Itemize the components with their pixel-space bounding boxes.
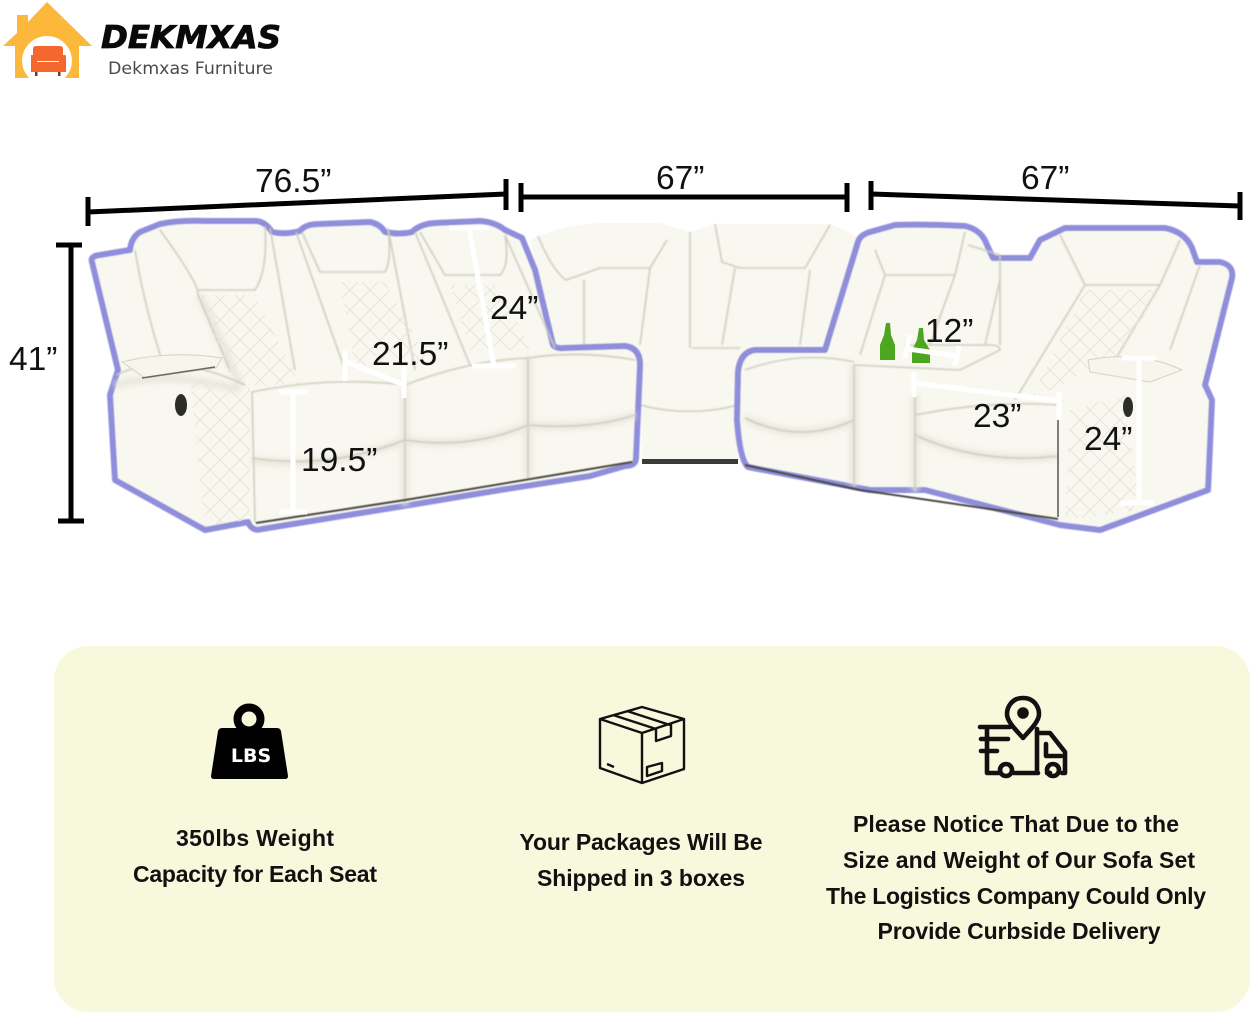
arm height dimension: 24: 24”: [1084, 421, 1132, 458]
sofa illustration: [92, 221, 1232, 530]
wordmark: DEKMXAS: [101, 20, 281, 56]
text: weight capacity: 350lbs Weight: [176, 825, 334, 851]
centre width dimension: 67: [521, 160, 847, 212]
back height dimension: 24: [449, 228, 538, 366]
text: curbside delivery notice: Size and Weight of Our Sofa Set: [843, 847, 1195, 873]
right shading: [745, 365, 1058, 490]
seat width dimension: 23: [914, 372, 1059, 435]
seat width dimension: 23: 23”: [973, 398, 1021, 435]
right arm control button: [1123, 397, 1133, 417]
text: curbside delivery notice: The Logistics Company Could Only: [826, 883, 1206, 909]
right width dimension: 67: 67”: [1021, 160, 1069, 197]
right seat cushions: [745, 358, 1058, 458]
arm height dimension: 24: [1084, 358, 1156, 503]
seat depth dimension: 21.5: 21.5”: [372, 336, 448, 373]
right width dimension: 67: [871, 160, 1240, 220]
overall width dimension: 76.5: [88, 163, 506, 226]
seat depth dimension: 21.5: [345, 336, 448, 398]
overall width dimension: 76.5: 76.5”: [255, 163, 331, 200]
text: packages: Your Packages Will Be: [520, 829, 762, 855]
text: curbside delivery notice: Provide Curbside Delivery: [878, 918, 1161, 944]
logo: Dekmxas Furniture: [3, 2, 281, 79]
icon: cardboard box: [600, 707, 684, 783]
console: [854, 345, 1000, 492]
green bottles: [880, 323, 930, 363]
height dimension: 41: 41”: [9, 341, 57, 378]
console width dimension: 12: 12”: [925, 313, 973, 350]
console width dimension: 12: [905, 313, 973, 366]
text: curbside delivery notice: Please Notice That Due to the: [853, 811, 1179, 837]
left seat cushions: [252, 354, 635, 522]
sofa right section with purple outline: [737, 225, 1232, 530]
panel: shipping information: [54, 646, 1250, 1012]
text: curbside delivery notice: [826, 811, 1206, 944]
icon: house with armchair: [3, 2, 92, 78]
height dimension: 41: [9, 245, 84, 521]
left shading: [115, 295, 635, 505]
text: weight capacity: Capacity for Each Seat: [133, 861, 377, 887]
right backrests: [860, 232, 1200, 400]
left backrests: [160, 226, 555, 370]
icon: delivery truck with location pin: [980, 698, 1065, 776]
left arm: [116, 250, 245, 385]
icon: LBS weight: LBS: [231, 745, 271, 767]
back height dimension: 24: 24”: [490, 290, 538, 327]
sofa left section with purple outline: [92, 221, 640, 530]
tagline: Dekmxas Furniture: [108, 59, 273, 79]
seat height dimension: 19.5: 19.5”: [301, 442, 377, 479]
seat height dimension: 19.5: [279, 392, 377, 512]
left arm control button: [175, 394, 187, 416]
text: packages: Shipped in 3 boxes: [537, 865, 745, 891]
text: packages: [520, 829, 762, 891]
sofa centre corner section: [530, 223, 860, 464]
text: weight capacity: [133, 825, 377, 887]
icon: LBS weight: [211, 708, 288, 779]
centre width dimension: 67: 67”: [656, 160, 704, 197]
